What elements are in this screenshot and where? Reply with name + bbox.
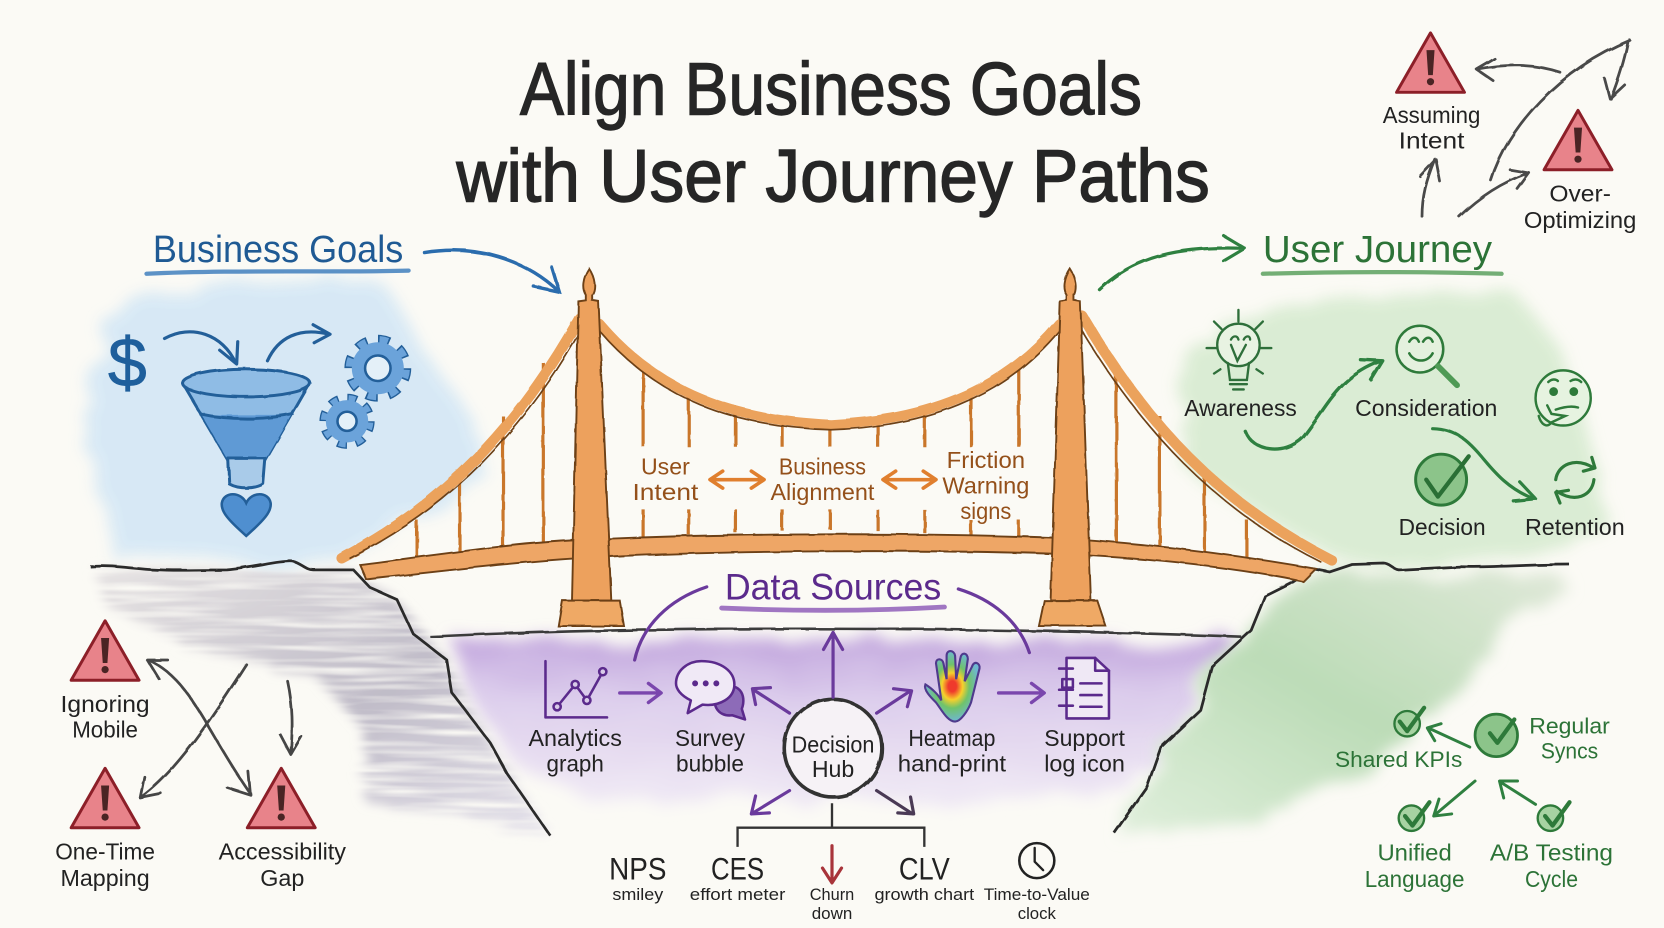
icon: analytics graph xyxy=(529,661,622,776)
icon: funnel xyxy=(183,369,310,488)
arrows: warning cycle lower left xyxy=(140,660,301,798)
bridge deck xyxy=(360,534,1316,582)
bridge xyxy=(342,268,1332,626)
journey: consideration xyxy=(1355,326,1497,421)
journey: awareness xyxy=(1184,310,1297,421)
heading: data sources: Data Sources xyxy=(725,566,941,608)
left tower xyxy=(558,268,624,626)
bridge labels: friction warning signs: signs xyxy=(960,498,1011,524)
warning: assuming intent xyxy=(1383,33,1480,154)
metric: time-to-value clock xyxy=(984,843,1090,923)
alignment: shared KPIs xyxy=(1335,708,1462,772)
warning: ignoring mobile xyxy=(61,621,150,743)
metric: churn down: down xyxy=(812,904,852,923)
title xyxy=(455,48,1210,218)
panel: green wash behind user journey xyxy=(1178,289,1613,565)
warning: one-time mapping xyxy=(55,768,155,891)
bridge labels: business alignment: Alignment xyxy=(770,479,875,505)
arrow: hub to lower right xyxy=(877,791,914,814)
warning: accessibility gap: Accessibility xyxy=(219,839,346,865)
journey: consideration: Consideration xyxy=(1355,395,1497,421)
warning: assuming intent: Assuming xyxy=(1383,102,1480,128)
metric: CLV xyxy=(874,851,974,904)
decision hub xyxy=(784,699,882,797)
icon: gears xyxy=(324,340,406,445)
warning: accessibility gap xyxy=(219,768,346,891)
alignment: shared KPIs: Shared KPIs xyxy=(1335,747,1462,772)
journey: awareness: Awareness xyxy=(1184,395,1297,421)
journey: retention xyxy=(1525,457,1625,540)
warning: one-time mapping: One-Time xyxy=(55,839,155,865)
metric: CES xyxy=(690,851,786,904)
bridge labels: friction warning signs: Friction xyxy=(947,447,1025,473)
metric: CLV: CLV xyxy=(899,851,950,887)
warning: assuming intent: Intent xyxy=(1399,128,1465,154)
icon: survey bubble xyxy=(675,661,745,776)
arrow: awareness to consideration xyxy=(1245,360,1383,449)
title: Align Business Goals xyxy=(520,48,1142,131)
alignment: regular syncs: Syncs xyxy=(1541,739,1598,764)
bridge labels: user intent xyxy=(632,453,699,505)
bridge labels: business alignment: Business xyxy=(779,453,866,479)
arrow: analytics to survey xyxy=(620,683,661,702)
bridge main cables xyxy=(342,316,1332,562)
icon: heatmap hand-print: Heatmap xyxy=(908,725,995,751)
decision hub: Decision xyxy=(792,731,874,757)
alignment: A/B testing cycle xyxy=(1490,802,1613,892)
warning: over-optimizing: Optimizing xyxy=(1524,207,1636,233)
arrow: heatmap to support log xyxy=(999,683,1044,702)
decision hub: Hub xyxy=(812,756,854,782)
alignment: A/B testing cycle: Cycle xyxy=(1525,866,1578,892)
icon: dollar sign: $ xyxy=(108,323,147,401)
panel: purple wash under data sources xyxy=(451,640,1236,801)
icon: thinking face xyxy=(1536,370,1591,426)
alignment: regular syncs: Regular xyxy=(1529,713,1610,738)
heading: business goals: Business Goals xyxy=(153,228,403,271)
metric: NPS: smiley xyxy=(612,885,664,904)
icon: survey bubble: Survey xyxy=(675,725,745,751)
bridge labels: user intent: User xyxy=(641,453,690,479)
metric: churn down: Churn xyxy=(810,885,854,904)
icon: support log: log icon xyxy=(1044,750,1125,776)
icon: analytics graph: graph xyxy=(547,750,604,776)
bridge labels: business alignment xyxy=(770,453,875,505)
metric: time-to-value clock: clock xyxy=(1018,904,1056,923)
icon: heatmap hand-print: hand-print xyxy=(898,750,1007,776)
bridge labels: friction warning signs xyxy=(942,447,1029,524)
heading: user journey: User Journey xyxy=(1263,228,1493,271)
warning: accessibility gap: Gap xyxy=(260,865,304,891)
bridge suspenders xyxy=(417,361,1247,558)
arcs: data sources to sources xyxy=(635,587,1029,660)
title: with User Journey Paths xyxy=(455,135,1210,218)
journey: retention: Retention xyxy=(1525,514,1625,540)
metric: CLV: growth chart xyxy=(874,885,974,904)
icon: support log: Support xyxy=(1044,725,1125,751)
warning: one-time mapping: Mapping xyxy=(61,865,150,891)
alignment: regular syncs xyxy=(1475,713,1610,764)
right cliff xyxy=(1114,563,1570,833)
bracket: metric tree xyxy=(738,803,924,847)
river line xyxy=(430,629,1242,637)
left cliff xyxy=(90,561,550,835)
icon: survey bubble: bubble xyxy=(676,750,744,776)
arrows: warning cycle top right xyxy=(1420,40,1630,216)
metric: CES: CES xyxy=(711,851,764,887)
warning: ignoring mobile: Mobile xyxy=(72,717,138,743)
alignment: unified language: Language xyxy=(1365,866,1464,892)
icon: analytics graph: Analytics xyxy=(529,725,622,751)
bridge labels: friction warning signs: Warning xyxy=(942,472,1029,498)
journey: decision xyxy=(1399,454,1486,540)
panel: blue wash behind business goals xyxy=(90,282,483,565)
metric: churn down xyxy=(810,846,854,923)
icon: heatmap hand-print xyxy=(898,651,1007,776)
warning: over-optimizing: Over- xyxy=(1549,181,1611,207)
arrow: business goals to bridge xyxy=(425,250,559,292)
arrows: decision hub spokes xyxy=(751,632,912,814)
alignment: unified language xyxy=(1365,802,1464,892)
arrow: consideration to retention xyxy=(1433,429,1536,501)
arrow: intent and alignment xyxy=(710,471,764,488)
journey: decision: Decision xyxy=(1399,514,1486,540)
right tower xyxy=(1039,268,1106,626)
metric: NPS xyxy=(609,851,666,904)
metric: CES: effort meter xyxy=(690,885,786,904)
arrows: alignment cycle xyxy=(1427,724,1536,816)
bridge labels: user intent: Intent xyxy=(632,479,699,505)
metric: time-to-value clock: Time-to-Value xyxy=(984,885,1090,904)
alignment: A/B testing cycle: A/B Testing xyxy=(1490,840,1613,866)
arrow: alignment and friction xyxy=(883,471,936,488)
warning: over-optimizing xyxy=(1524,110,1636,233)
alignment: unified language: Unified xyxy=(1377,840,1452,866)
warning: ignoring mobile: Ignoring xyxy=(61,691,150,717)
metric: NPS: NPS xyxy=(609,851,666,887)
icon: heart xyxy=(222,494,271,536)
icon: support log xyxy=(1044,658,1125,776)
icon: funnel arrows xyxy=(165,325,330,364)
arrow: bridge to user journey xyxy=(1099,236,1245,290)
